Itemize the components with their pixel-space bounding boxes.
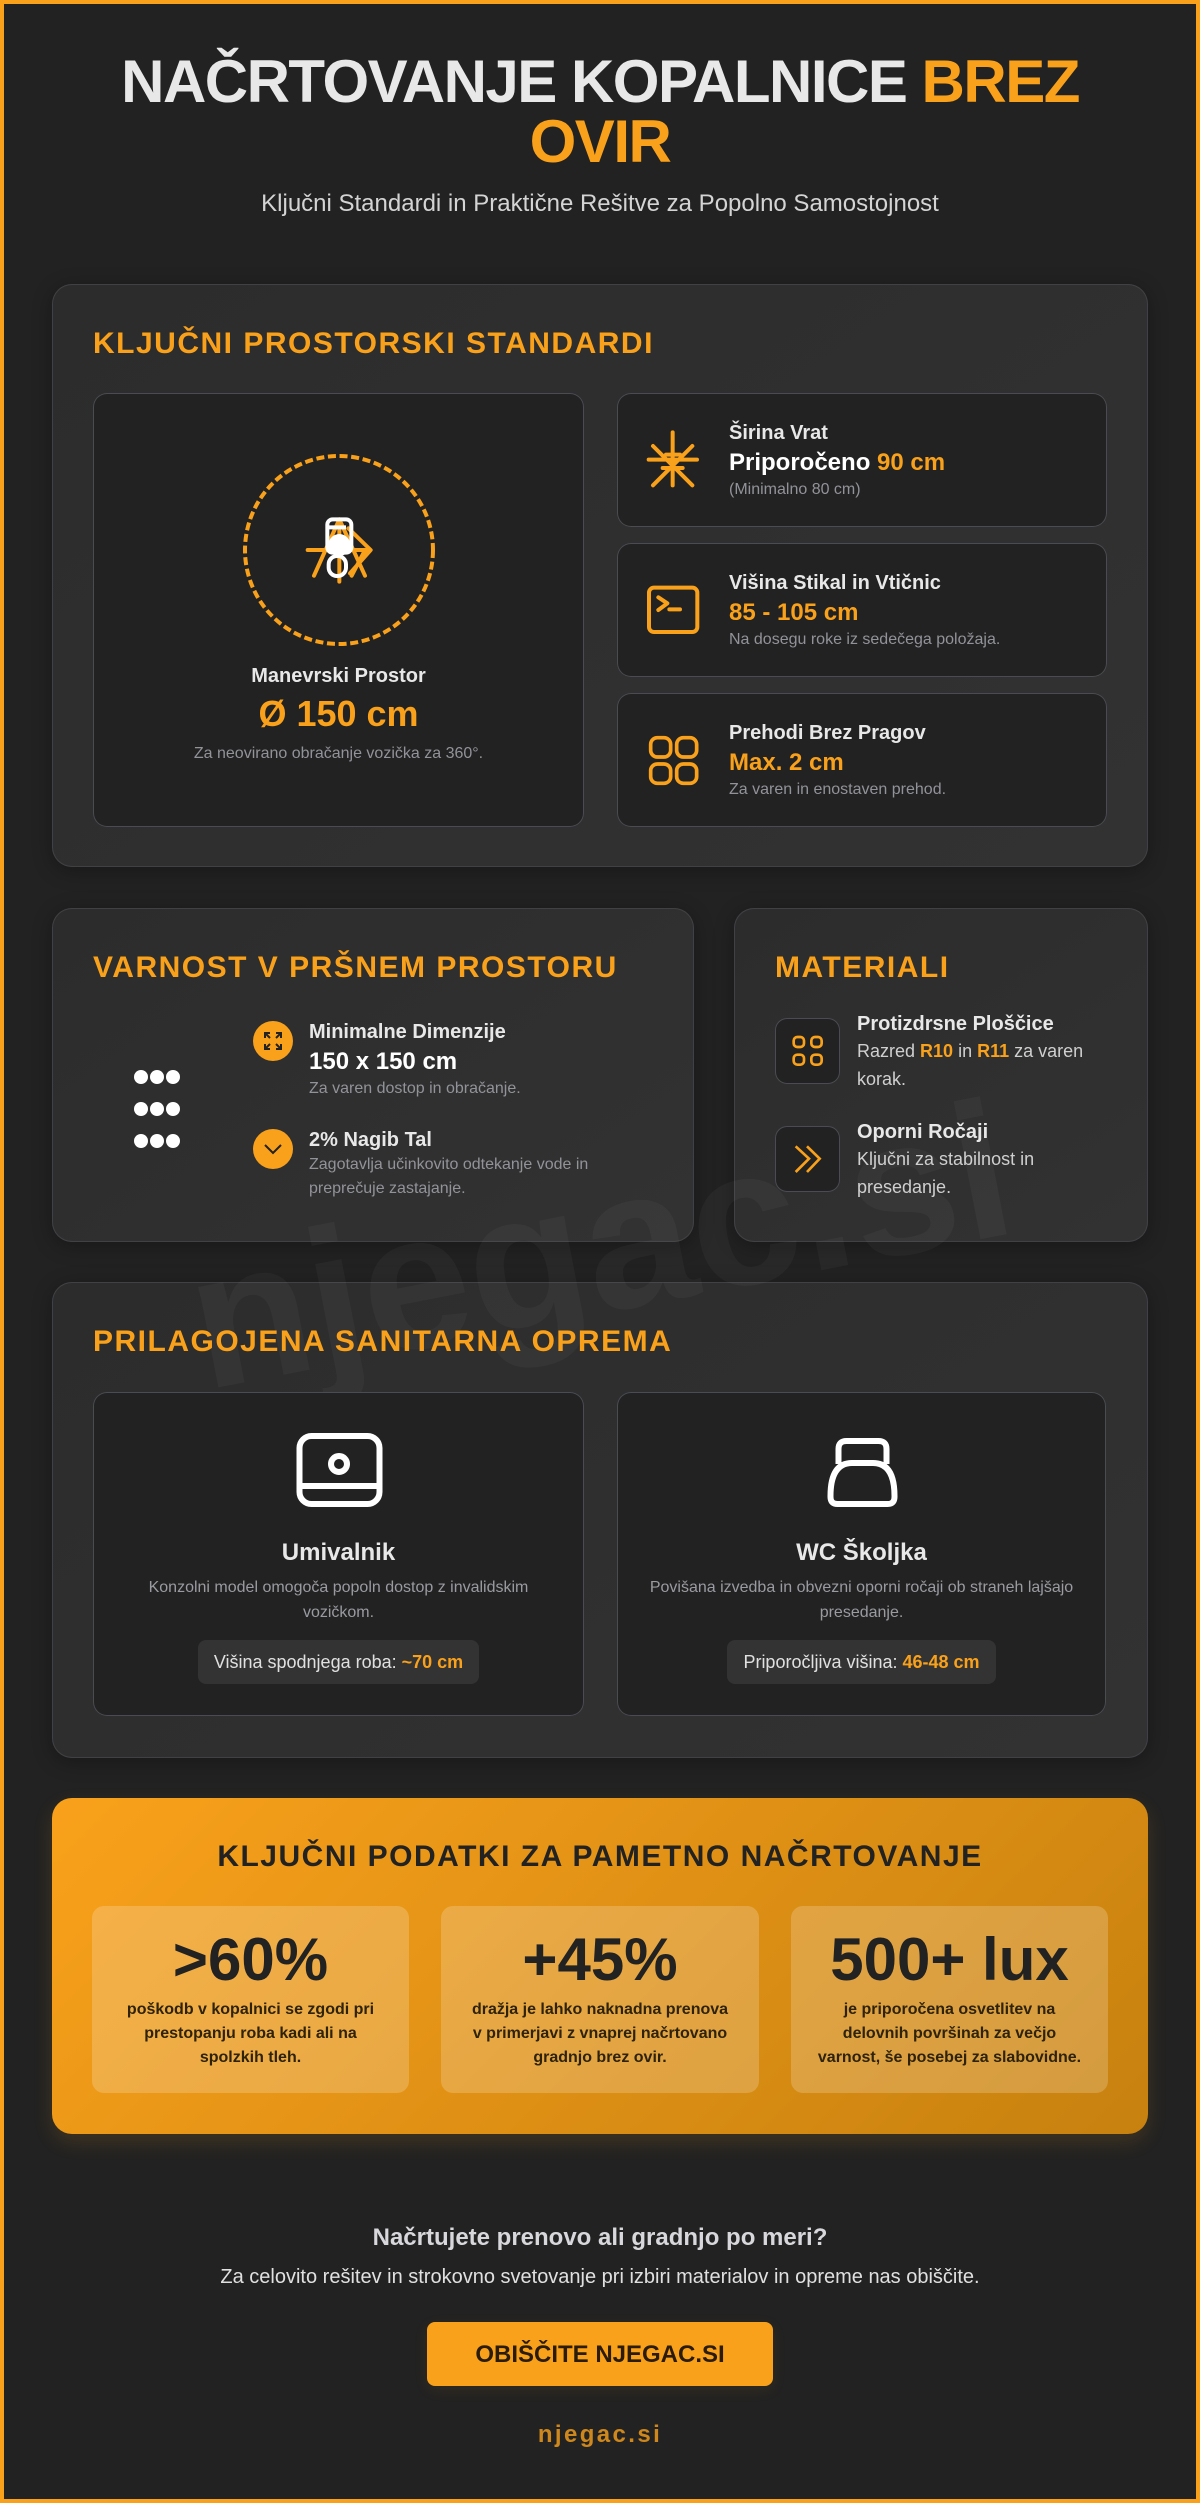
- label: Oporni Ročaji: [857, 1121, 988, 1143]
- description: [472, 2001, 728, 2066]
- button: OBIŠČITE NJEGAC.SI: [475, 2341, 725, 2368]
- heading: varnost: VARNOST V PRŠNEM PROSTORU: [93, 951, 618, 984]
- note: Za varen in enostaven prehod.: [729, 781, 946, 798]
- label: Protizdrsne Ploščice: [857, 1013, 1054, 1035]
- item: nagib tal: [309, 1129, 588, 1197]
- card: wc školjka: [617, 1392, 1106, 1716]
- description: [818, 2001, 1081, 2066]
- heading: sanitarna oprema: PRILAGOJENA SANITARNA OPREMA: [93, 1325, 672, 1358]
- description: spolzkih tleh.: [200, 2049, 301, 2066]
- spec pill: Priporočljiva višina: 46-48 cm: [743, 1652, 980, 1672]
- label: Širina Vrat: [729, 422, 828, 444]
- value: +45%: [522, 1926, 678, 1993]
- description: varnost, še posebej za slabovidne.: [818, 2049, 1081, 2066]
- value: Ø 150 cm: [258, 693, 419, 734]
- description: [650, 1579, 1073, 1621]
- panel: sanitarna oprema: [52, 1282, 1148, 1758]
- footer heading: Načrtujete prenovo ali gradnjo po meri?: [373, 2224, 827, 2251]
- header: [121, 48, 1079, 217]
- subtitle: Ključni Standardi in Praktične Rešitve za Popolno Samostojnost: [261, 190, 939, 217]
- text: presedanje.: [857, 1177, 951, 1197]
- spec pill: [198, 1640, 479, 1684]
- description: vozičkom.: [303, 1604, 374, 1621]
- footer call to action: [220, 2224, 980, 2448]
- item: protizdrsne ploščice: [857, 1013, 1083, 1089]
- icon: washbasin: [296, 1433, 382, 1507]
- stat: poškodbe: [92, 1906, 409, 2093]
- label: WC Školjka: [796, 1539, 927, 1566]
- title: NAČRTOVANJE KOPALNICE BREZ OVIR: [121, 48, 1079, 175]
- label: 2% Nagib Tal: [309, 1129, 432, 1151]
- value: 500+ lux: [830, 1926, 1069, 1993]
- watermark: njegac.si: [172, 1060, 1028, 1431]
- label: Višina Stikal in Vtičnic: [729, 572, 941, 594]
- card: prehodi brez pragov: [617, 693, 1107, 827]
- icon: switch panel: [647, 586, 700, 634]
- description: dražja je lahko naknadna prenova: [472, 2001, 728, 2018]
- stat: osvetlitev: [791, 1906, 1108, 2093]
- note: Na dosegu roke iz sedečega položaja.: [729, 631, 1000, 648]
- text: [857, 1149, 1034, 1197]
- text: korak.: [857, 1069, 906, 1089]
- icon: threshold grid: [648, 736, 698, 786]
- description: v primerjavi z vnaprej načrtovano: [473, 2025, 727, 2042]
- heading: prostorski standardi: KLJUČNI PROSTORSKI STANDARDI: [93, 327, 654, 360]
- description: Za neovirano obračanje vozička za 360°.: [194, 745, 483, 762]
- panel: materiali: [734, 908, 1148, 1242]
- card: umivalnik: [93, 1392, 584, 1716]
- note: Za varen dostop in obračanje.: [309, 1080, 521, 1097]
- description: prestopanju roba kadi ali na: [144, 2025, 357, 2042]
- heading: ključni podatki: KLJUČNI PODATKI ZA PAMETNO NAČRTOVANJE: [217, 1840, 983, 1873]
- label: Umivalnik: [282, 1539, 395, 1566]
- icon: anti-slip tiles: [775, 1018, 840, 1084]
- stat: prenova: [441, 1906, 759, 2093]
- icon: floor slope: [253, 1129, 293, 1169]
- description: delovnih površinah za večjo: [843, 2025, 1056, 2042]
- text: Razred R10 in R11 za varen: [857, 1041, 1083, 1061]
- item: oporni ročaji: [857, 1121, 1034, 1197]
- button: [427, 2322, 773, 2386]
- note: [309, 1156, 588, 1197]
- note: Zagotavlja učinkovito odtekanje vode in: [309, 1156, 588, 1173]
- value: >60%: [173, 1926, 328, 1993]
- icon: expand dimensions: [253, 1021, 293, 1061]
- label: Prehodi Brez Pragov: [729, 722, 926, 744]
- footer logo: njegac.si: [538, 2421, 662, 2448]
- panel: varnost v pršnem prostoru: [52, 908, 694, 1242]
- description: [149, 1579, 528, 1621]
- card: manevrski prostor: [93, 393, 584, 827]
- heading: materiali: MATERIALI: [775, 951, 950, 984]
- item: minimalne dimenzije: [309, 1021, 521, 1097]
- icon: toilet: [828, 1438, 898, 1507]
- text: [857, 1041, 1083, 1089]
- label: Minimalne Dimenzije: [309, 1021, 506, 1043]
- spec pill: [727, 1640, 996, 1684]
- icon: grab rails: [775, 1126, 840, 1192]
- card: višina stikal: [617, 543, 1107, 677]
- icon: shower drops: [134, 1070, 180, 1148]
- panel: ključni podatki: [47, 1798, 1153, 2147]
- label: Manevrski Prostor: [251, 665, 426, 687]
- description: [127, 2001, 374, 2066]
- note: preprečuje zastajanje.: [309, 1180, 466, 1197]
- spec pill: Višina spodnjega roba: ~70 cm: [214, 1652, 463, 1672]
- description: je priporočena osvetlitev na: [844, 2001, 1055, 2018]
- description: Povišana izvedba in obvezni oporni ročaji ob straneh lajšajo: [650, 1579, 1073, 1596]
- description: presedanje.: [820, 1604, 903, 1621]
- description: poškodb v kopalnici se zgodi pri: [127, 2001, 374, 2018]
- footer text: Za celovito rešitev in strokovno svetovanje pri izbiri materialov in opreme nas obiščite.: [220, 2266, 980, 2288]
- icon: wheelchair turning circle: [243, 454, 435, 646]
- value: 85 - 105 cm: [729, 599, 858, 626]
- text: Ključni za stabilnost in: [857, 1149, 1034, 1169]
- description: Konzolni model omogoča popoln dostop z invalidskim: [149, 1579, 528, 1596]
- description: gradnjo brez ovir.: [533, 2049, 667, 2066]
- note: (Minimalno 80 cm): [729, 481, 861, 498]
- card: širina vrat: [617, 393, 1107, 527]
- panel: prostorski standardi: [52, 284, 1148, 867]
- value: Max. 2 cm: [729, 749, 844, 776]
- icon: door width: [646, 430, 699, 488]
- value: 150 x 150 cm: [309, 1048, 457, 1075]
- value: Priporočeno 90 cm: [729, 449, 945, 476]
